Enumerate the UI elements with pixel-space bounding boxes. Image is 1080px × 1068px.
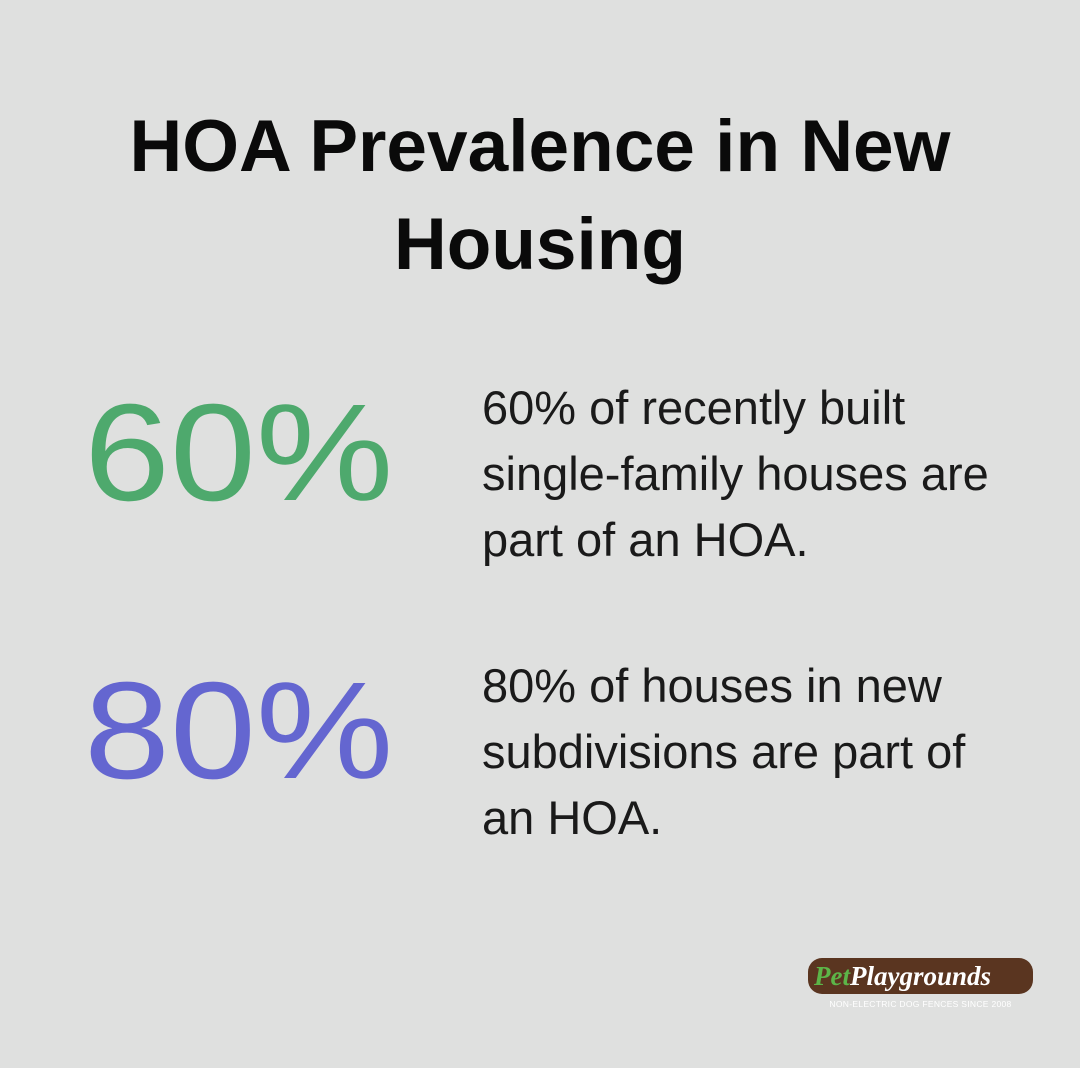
stat: 80%: 80% [84,654,393,808]
logo: NON-ELECTRIC DOG FENCES SINCE 2008 [829,999,1012,1009]
stat: 60%: 60% [84,376,393,530]
title: HOA Prevalence in New [130,106,950,187]
title [130,106,950,285]
text: 60% description: part of an HOA. [482,513,809,566]
text: 80% description: 80% of houses in new [482,659,942,712]
text: 60% description: single-family houses are [482,447,989,500]
text: 80% description: subdivisions are part of [482,725,965,778]
text: 80% description [482,659,966,844]
text: 60% description: 60% of recently built [482,381,905,434]
text: 80% description: an HOA. [482,791,662,844]
logo: PetPlaygrounds [814,961,991,991]
text: 60% description [482,381,989,566]
logo [808,958,1033,1009]
title: Housing [394,204,686,285]
